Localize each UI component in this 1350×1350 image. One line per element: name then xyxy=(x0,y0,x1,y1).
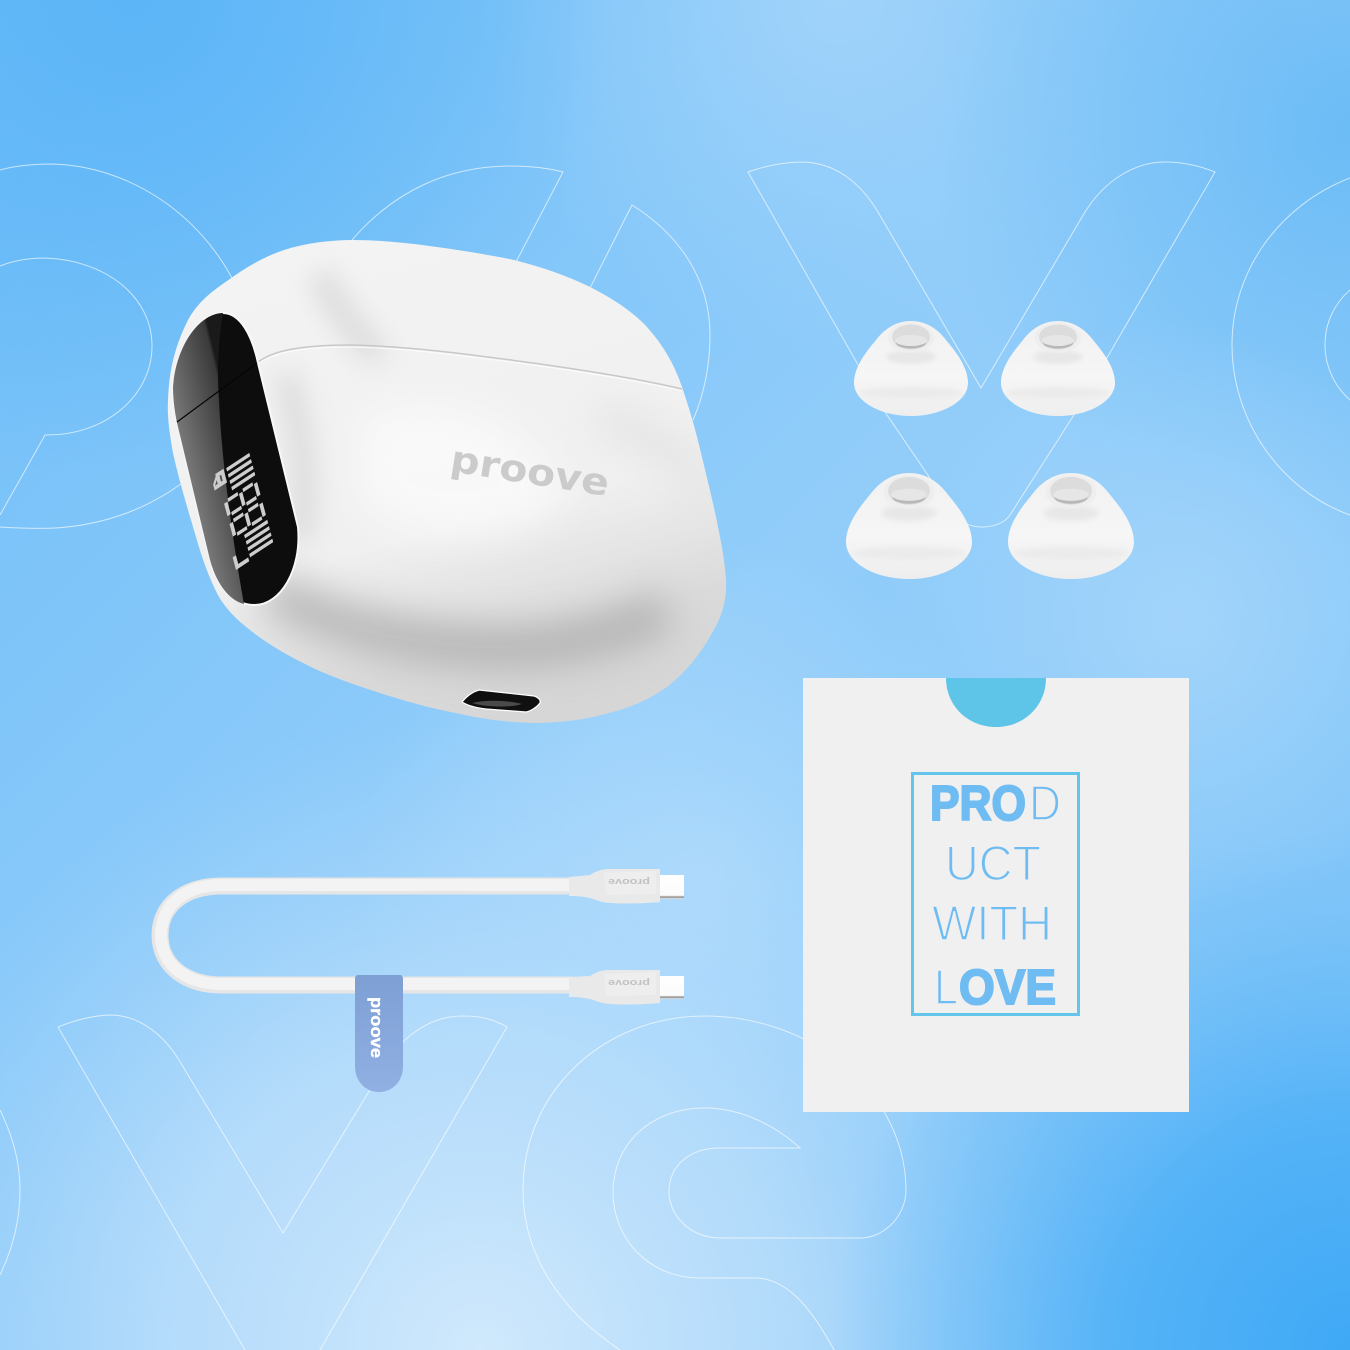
ear tip: bottom right xyxy=(1008,473,1134,579)
cable tie xyxy=(355,975,403,1092)
bottom connector: proove xyxy=(608,978,650,988)
slogan text: L xyxy=(934,961,958,1015)
charging port xyxy=(462,690,540,712)
case body xyxy=(168,240,726,723)
display seam xyxy=(177,363,257,422)
display window xyxy=(173,313,298,605)
bottom connector xyxy=(569,970,684,1004)
slogan text: PRO xyxy=(930,777,1026,831)
cable tie: proove xyxy=(367,997,386,1058)
charging case xyxy=(168,240,726,723)
case shading xyxy=(270,275,705,648)
cable wire xyxy=(160,885,572,985)
case logo: proove xyxy=(448,437,612,505)
display glare xyxy=(173,313,244,604)
slogan text: D xyxy=(1029,777,1061,831)
ear tips xyxy=(846,321,1134,579)
display digits xyxy=(211,452,274,570)
ear tip: top right xyxy=(1001,321,1115,416)
top connector: proove xyxy=(608,877,650,887)
slogan text: OVE xyxy=(959,961,1056,1015)
slogan frame xyxy=(912,774,1078,1014)
top connector xyxy=(569,869,684,904)
card notch xyxy=(946,678,1046,727)
USB-C cable xyxy=(160,869,684,1092)
lid seam xyxy=(257,345,682,391)
warranty card xyxy=(803,678,1189,1112)
ear tip: bottom left xyxy=(846,473,972,579)
slogan text xyxy=(930,777,1061,1015)
ear tip: top left xyxy=(854,321,968,416)
slogan text: UCT xyxy=(945,837,1041,891)
slogan text: WITH xyxy=(932,897,1052,951)
